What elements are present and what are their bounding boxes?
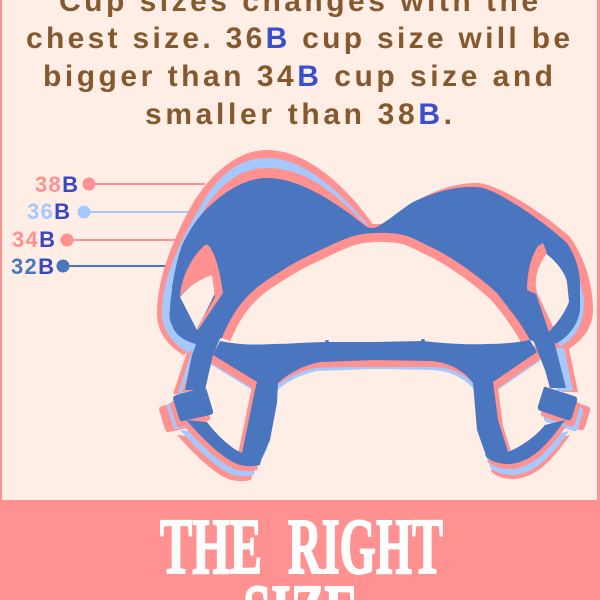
right strap xyxy=(497,293,566,388)
bottom title band xyxy=(0,500,600,600)
explanatory text: smaller than 38B. xyxy=(145,98,452,131)
left buckle xyxy=(173,388,213,421)
explanatory text xyxy=(26,0,570,131)
title: THE xyxy=(160,504,262,591)
left lower loop xyxy=(186,420,262,466)
belt right half xyxy=(375,340,537,458)
explanatory text: chest size. 36B cup size will be xyxy=(26,22,570,55)
cups and wings xyxy=(170,178,580,345)
bra diagram with layered sizes xyxy=(157,150,593,481)
title: RIGHT xyxy=(288,504,443,591)
34B layer xyxy=(170,168,580,471)
belt left half xyxy=(213,341,377,458)
legend: 38B xyxy=(35,172,205,197)
legend: 38B: 38B xyxy=(35,172,78,197)
32B layer: main blue bra xyxy=(170,178,580,466)
size legend xyxy=(11,172,205,279)
legend: 32B: 32B xyxy=(11,254,54,279)
legend: 34B xyxy=(12,227,186,252)
explanatory text: bigger than 34B cup size and xyxy=(43,60,553,93)
pink under-cup arc xyxy=(222,233,530,340)
legend: 34B: 34B xyxy=(12,227,55,252)
left strap xyxy=(185,320,228,390)
left cut-out xyxy=(180,245,223,330)
title xyxy=(160,504,443,600)
legend: 32B xyxy=(11,254,178,279)
right lower loop xyxy=(485,420,565,464)
36B layer xyxy=(162,158,584,476)
legend: 36B xyxy=(27,199,192,224)
right buckle xyxy=(538,387,577,420)
right cut-out xyxy=(527,243,569,332)
legend: 36B: 36B xyxy=(27,199,70,224)
38B layer xyxy=(157,150,593,481)
